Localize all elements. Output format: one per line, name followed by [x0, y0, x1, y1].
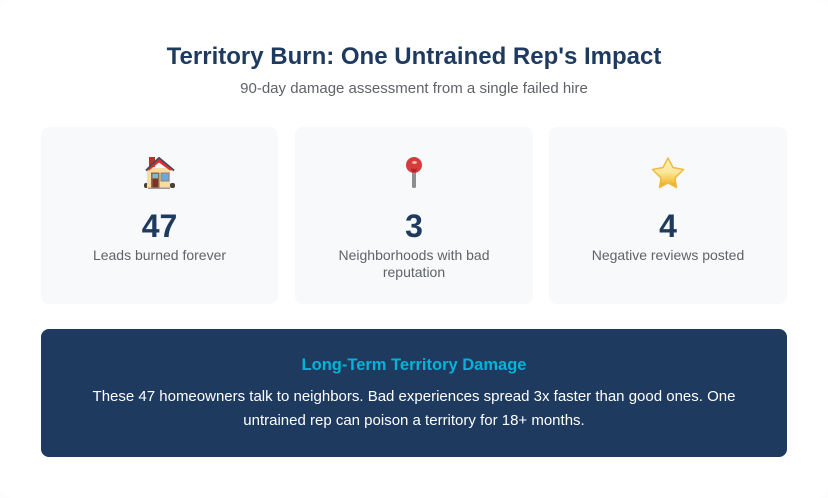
callout text: These 47 homeowners talk to neighbors. Bad experiences spread 3x faster than good ones. One — [93, 388, 735, 405]
title: Territory Burn: One Untrained Rep's Impact — [167, 43, 661, 70]
label: leads burned: Leads burned forever — [93, 247, 226, 263]
panel: reviews — [549, 127, 787, 304]
panel: leads burned — [41, 127, 278, 304]
stat: 3: 3 — [405, 208, 423, 244]
stat: 4: 4 — [659, 208, 677, 244]
callout text — [92, 388, 735, 429]
subtitle: 90-day damage assessment from a single failed hire — [240, 80, 588, 97]
icon: round pushpin — [406, 157, 422, 188]
label: reviews: Negative reviews posted — [592, 247, 744, 263]
label: neighborhoods: Neighborhoods with bad — [338, 247, 490, 263]
panel: neighborhoods — [295, 127, 533, 304]
stat: 47: 47 — [142, 208, 177, 244]
callout text: untrained rep can poison a territory for 18+ months. — [243, 412, 585, 429]
icon: house — [144, 157, 175, 189]
callout: long-term damage — [41, 329, 787, 457]
label: neighborhoods — [338, 247, 490, 280]
icon: star — [652, 157, 684, 188]
callout heading: Long-Term Territory Damage — [302, 356, 526, 374]
label: neighborhoods: reputation — [383, 264, 445, 280]
